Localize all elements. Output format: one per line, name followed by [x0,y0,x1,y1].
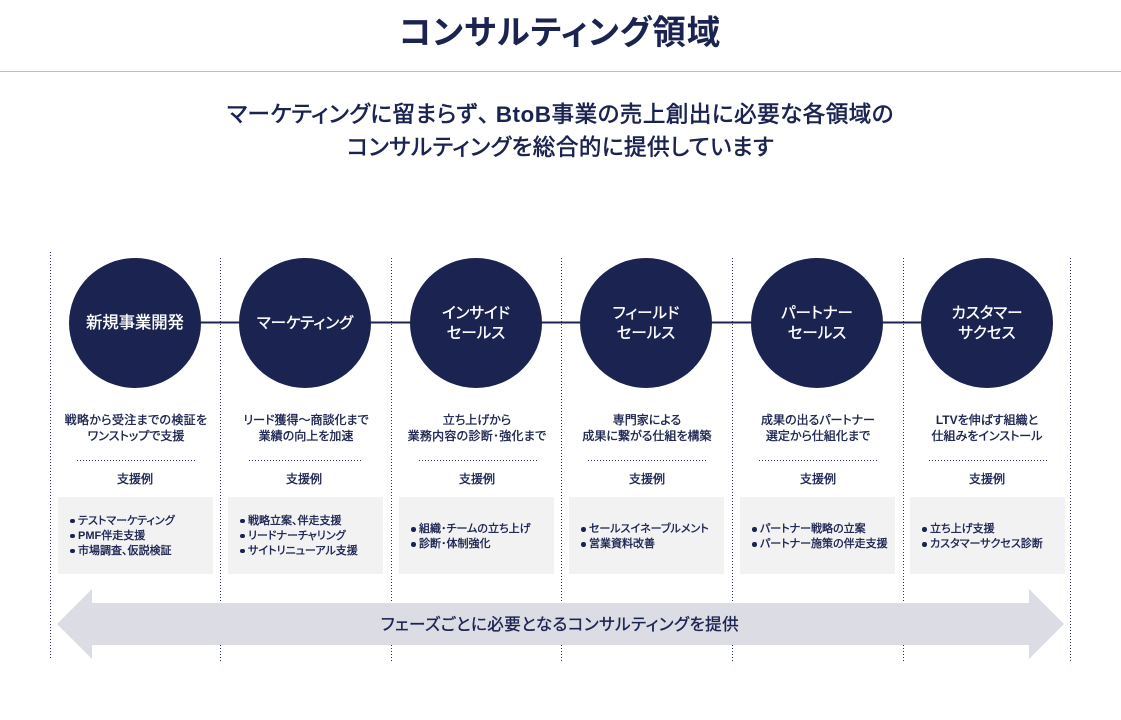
phase circle: 新規事業開発 [69,258,201,388]
phase circle: カスタマーサクセス: カスタマー [952,305,1022,322]
phase circle: マーケティング [239,258,371,388]
description: パートナーセールス: 成果の出るパートナー [761,413,875,427]
example box: インサイドセールス: 組織･チームの立ち上げ [419,523,531,535]
description: カスタマーサクセス: 仕組みをインストール [932,429,1042,443]
description: カスタマーサクセス: LTVを伸ばす組織と [936,413,1038,427]
description: 新規事業開発 [64,413,207,443]
phase circle: マーケティング: マーケティング [257,315,353,332]
example box: 新規事業開発: テストマーケティング [78,514,175,526]
phase circle: 新規事業開発: 新規事業開発 [86,314,184,332]
phase circle: フィールドセールス [580,258,712,388]
example box: パートナーセールス: パートナー戦略の立案 [760,523,866,535]
phase circle: フィールドセールス: セールス [617,324,675,342]
description: 新規事業開発: ワンストップで支援 [88,429,184,443]
title: コンサルティング領域 [399,15,721,52]
description: マーケティング: 業績の向上を加速 [259,429,353,443]
example box: カスタマーサクセス: 立ち上げ支援 [930,523,995,535]
example box: マーケティング: 戦略立案、伴走支援 [248,514,342,526]
label: 支援例 3: 支援例 [459,472,495,486]
description: パートナーセールス: 選定から仕組化まで [766,429,870,443]
description: インサイドセールス: 業務内容の診断･強化まで [408,429,546,443]
example box: フィールドセールス [569,497,724,574]
example box: 新規事業開発: PMF伴走支援 [78,530,145,542]
subtitle [227,102,894,160]
description: 新規事業開発: 戦略から受注までの検証を [65,413,207,427]
example box: フィールドセールス: セールスイネーブルメント [589,523,709,535]
phase circle: カスタマーサクセス [921,258,1053,388]
phase circle: インサイドセールス: セールス [447,324,505,342]
example box: マーケティング: リードナーチャリング [248,530,346,542]
example box: マーケティング [228,497,383,574]
description: インサイドセールス: 立ち上げから [443,413,511,427]
phase circle: カスタマーサクセス: サクセス [958,324,1016,342]
phase circle: パートナーセールス: パートナー [781,305,853,322]
phase circle: パートナーセールス: セールス [788,324,846,342]
example box: 新規事業開発: 市場調査、仮説検証 [78,544,172,556]
description: フィールドセールス [582,413,712,443]
description: カスタマーサクセス [932,413,1042,443]
phase circle: パートナーセールス [751,258,883,388]
label: 支援例 6: 支援例 [969,472,1005,486]
description: マーケティング: リード獲得〜商談化まで [243,413,369,427]
label: 支援例 1: 支援例 [117,472,153,486]
description: パートナーセールス [761,413,875,443]
example box: カスタマーサクセス [910,497,1065,574]
arrow caption: フェーズごとに必要となるコンサルティングを提供 [381,616,739,634]
example box: カスタマーサクセス: カスタマーサクセス診断 [930,538,1043,550]
description: フィールドセールス: 専門家による [613,413,681,427]
double-headed arrow [57,589,1064,659]
description: インサイドセールス [408,413,546,443]
description: マーケティング [243,413,369,443]
label: 支援例 5: 支援例 [800,472,836,486]
example box: パートナーセールス [740,497,895,574]
example box: インサイドセールス: 診断･体制強化 [419,538,490,550]
label: 支援例 4: 支援例 [629,472,665,486]
label: 支援例 2: 支援例 [286,472,322,486]
phase circle: インサイドセールス: インサイド [442,305,510,322]
example box: フィールドセールス: 営業資料改善 [589,538,655,550]
subtitle: コンサルティングを総合的に提供しています [347,135,774,160]
description: フィールドセールス: 成果に繋がる仕組を構築 [582,429,712,443]
example box: 新規事業開発 [58,497,213,574]
subtitle: マーケティングに留まらず、BtoB事業の売上創出に必要な各領域の [227,102,894,127]
example box: パートナーセールス: パートナー施策の伴走支援 [760,538,888,550]
example box: インサイドセールス [399,497,554,574]
example box: マーケティング: サイトリニューアル支援 [248,544,358,556]
phase circle: フィールドセールス: フィールド [613,305,679,322]
phase circle: インサイドセールス [410,258,542,388]
